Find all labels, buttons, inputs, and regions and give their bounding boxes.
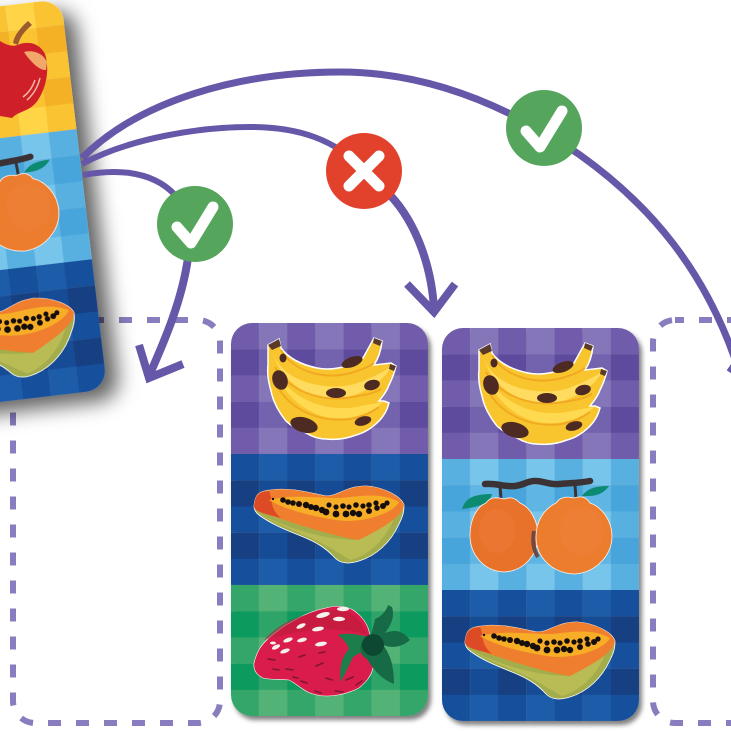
section: navy with papaya — [0, 259, 107, 412]
section: navy with papaya — [231, 454, 428, 585]
card: banana oranges papaya — [442, 328, 639, 721]
section: navy with papaya — [442, 590, 639, 721]
dashed drop zone: right — [653, 320, 731, 723]
section: purple with banana — [442, 328, 639, 460]
arrow: outer arc to right zone — [82, 72, 731, 378]
icon: red cross badge — [326, 133, 402, 209]
card: tilted, apple orange papaya — [0, 0, 107, 412]
section: purple with banana — [231, 323, 428, 455]
icon: apple — [0, 21, 47, 118]
dashed drop zone: left — [13, 320, 220, 723]
arrow: middle arc to card — [82, 127, 455, 312]
arrow: short arc to left zone — [83, 172, 188, 378]
section: sky blue with oranges — [442, 459, 639, 590]
section: sky blue with oranges — [0, 129, 92, 282]
section: green with strawberry — [231, 585, 428, 716]
section: yellow with apple — [0, 0, 77, 153]
icon: green check badge left — [157, 186, 233, 262]
card: banana papaya strawberry — [231, 323, 428, 716]
icon: green check badge right — [506, 90, 582, 166]
